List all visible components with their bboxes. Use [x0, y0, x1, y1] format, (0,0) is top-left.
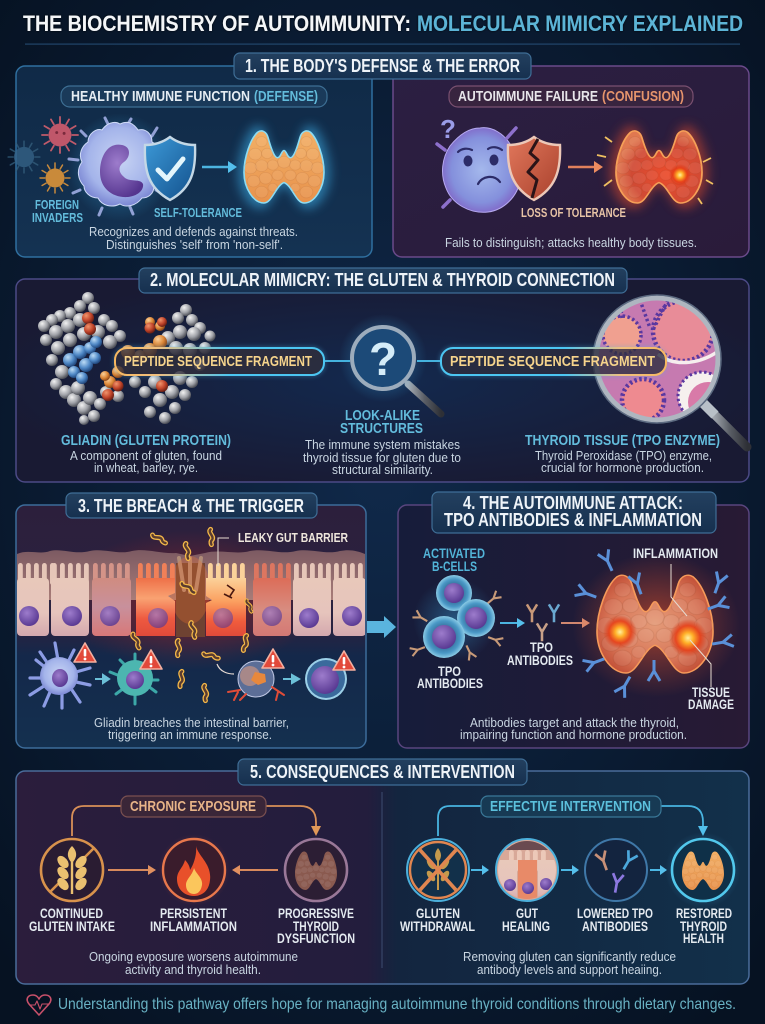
arrow: [95, 675, 109, 683]
label: progressive thyroid dysfunction: PROGRESSIVE: [278, 906, 354, 921]
text block: gliadin: GLIADIN (GLUTEN PROTEIN): [61, 433, 231, 449]
label: tissue damage: DAMAGE: [688, 697, 734, 712]
damaged cells: [136, 563, 246, 636]
pill heading: autoimmune failure: (CONFUSION): [602, 89, 684, 105]
label: tpo antibodies center: [507, 640, 573, 668]
icon: foreign invaders: [8, 117, 78, 193]
label: restored thyroid health: [676, 906, 732, 946]
pill heading: healthy immune function: [61, 86, 327, 107]
pill: effective intervention: [438, 796, 708, 836]
gap between damaged cells: [170, 556, 210, 637]
label: persistent inflammation: [150, 906, 237, 934]
pill heading: autoimmune failure: [449, 86, 693, 107]
icon: persistent inflammation: [158, 834, 230, 906]
label: gluten withdrawal: WITHDRAWAL: [400, 919, 475, 934]
label: foreign invaders: INVADERS: [32, 210, 83, 225]
arrow: [500, 618, 525, 628]
gliadin fragments: [133, 529, 251, 701]
label: tpo antibodies left: ANTIBODIES: [417, 676, 483, 691]
description: attack: [460, 715, 687, 742]
arrow: [650, 865, 667, 875]
label: tpo antibodies center: ANTIBODIES: [507, 653, 573, 668]
section heading 2: [139, 268, 627, 293]
description: healthy function: [89, 224, 298, 252]
icon: broken shield: [508, 137, 560, 200]
label: peptide fragment left: [113, 346, 326, 377]
pill: chronic exposure: [72, 796, 321, 836]
icon: continued gluten intake: [41, 839, 103, 901]
icon: infected cell: [217, 649, 284, 700]
arrow: [232, 865, 278, 875]
label: activated b-cells: B-CELLS: [432, 559, 477, 574]
label: continued gluten intake: CONTINUED: [40, 906, 103, 921]
description: chronic exposure: [89, 949, 298, 977]
label: inflammation: INFLAMMATION: [633, 546, 718, 561]
description: intervention: antibody levels and support heaiing.: [477, 962, 662, 977]
pill: chronic exposure: CHRONIC EXPOSURE: [130, 799, 256, 815]
text block: thyroid tissue: [525, 433, 720, 475]
pill: effective intervention: EFFECTIVE INTERVENTION: [490, 799, 651, 815]
label: activated b-cells: [423, 546, 485, 574]
icon: immune cell: [68, 113, 172, 221]
arrow: [561, 618, 590, 628]
panel: autoimmune attack: [398, 505, 749, 748]
label: foreign invaders: FOREIGN: [35, 197, 79, 212]
text block: look-alike structures: structural similarity.: [332, 462, 433, 477]
icon: healthy thyroid: [238, 125, 330, 209]
icon: gluten withdrawal: [407, 839, 469, 901]
panel: breach and trigger: [16, 505, 371, 748]
description: autoimmune failure: Fails to distinguish; attacks healthy body tissues.: [445, 235, 697, 250]
icon: look-alike magnifier: [339, 314, 441, 414]
label: peptide fragment right: [439, 346, 668, 377]
panel: healthy immune function: [8, 66, 372, 257]
label: lowered tpo antibodies: LOWERED TPO: [577, 906, 653, 921]
icon: confused cell: ?: [440, 114, 456, 144]
label: self-tolerance: SELF-TOLERANCE: [154, 205, 242, 220]
icon: restored thyroid: [665, 832, 741, 908]
label: restored thyroid health: HEALTH: [683, 931, 724, 946]
label: peptide fragment right: PEPTIDE SEQUENCE FRAGMENT: [450, 354, 655, 370]
arrow: [471, 865, 489, 875]
section heading 2: 2. MOLECULAR MIMICRY: THE GLUTEN & THYROID CONNECTION: [150, 270, 615, 290]
label: gluten withdrawal: [400, 906, 475, 934]
label: tissue damage: TISSUE: [692, 685, 730, 700]
label: peptide fragment left: PEPTIDE SEQUENCE FRAGMENT: [124, 354, 312, 370]
panel: molecular mimicry: [16, 279, 749, 482]
text block: look-alike structures: thyroid tissue for gluten due to: [303, 450, 461, 465]
label: persistent inflammation: INFLAMMATION: [150, 919, 237, 934]
icon: dendritic cell: [30, 643, 96, 708]
section heading 1: 1. THE BODY'S DEFENSE & THE ERROR: [245, 56, 520, 76]
text block: thyroid tissue: THYROID TISSUE (TPO ENZYME): [525, 433, 720, 449]
title: THE BIOCHEMISTRY OF AUTOIMMUNITY:: [23, 11, 411, 36]
arrow: section 3 to 4: [367, 616, 396, 638]
text block: gliadin: in wheat, barley, rye.: [94, 460, 198, 475]
section heading 5: [238, 759, 527, 785]
title: [23, 11, 743, 36]
description: chronic exposure: activity and thyroid health.: [125, 962, 261, 977]
section heading 4: 4. THE AUTOIMMUNE ATTACK:: [463, 493, 683, 513]
label: tpo antibodies left: [417, 664, 483, 691]
label: tpo antibodies left: TPO: [438, 664, 461, 679]
label: gluten withdrawal: GLUTEN: [416, 906, 460, 921]
label: tissue damage: [688, 640, 734, 712]
label: tpo antibodies center: TPO: [530, 640, 553, 655]
pill heading: healthy immune function: (DEFENSE): [254, 89, 318, 105]
icon: gliadin molecule: [38, 292, 216, 425]
icon: b-cells: [410, 575, 503, 662]
icon: progressive thyroid dysfunction: [285, 839, 347, 901]
icon: activated teal cell: [110, 650, 162, 704]
icon: sad face: [458, 147, 502, 184]
section heading 5: 5. CONSEQUENCES & INTERVENTION: [250, 762, 515, 782]
panel: consequences and intervention: [16, 771, 749, 984]
icon: antibodies: [527, 604, 559, 641]
panel: autoimmune failure: [393, 66, 749, 257]
label: foreign invaders: [32, 197, 83, 225]
connector lines: [324, 360, 441, 362]
description: intervention: [463, 949, 676, 977]
description: healthy function: Recognizes and defends against threats.: [89, 224, 298, 239]
pill heading: autoimmune failure: AUTOIMMUNE FAILURE: [458, 89, 598, 105]
icon: attacked thyroid: [572, 553, 740, 697]
description: intervention: Removing gluten can significantly reduce: [463, 949, 676, 964]
text block: gliadin: A component of gluten, found: [70, 448, 222, 463]
pill heading: healthy immune function: HEALTHY IMMUNE FUNCTION: [71, 89, 250, 105]
arrow: [568, 161, 603, 173]
icon: plasma cell: [305, 651, 355, 700]
icon: look-alike magnifier: ?: [369, 333, 397, 385]
text block: look-alike structures: STRUCTURES: [340, 421, 423, 437]
arrow: [283, 675, 299, 683]
text block: look-alike structures: LOOK-ALIKE: [345, 408, 420, 424]
section heading 4: [432, 492, 716, 533]
description: healthy function: Distinguishes 'self' from 'non-self'.: [106, 237, 283, 252]
gut barrier cells: [17, 537, 365, 664]
label: restored thyroid health: RESTORED: [676, 906, 732, 921]
text block: look-alike structures: [303, 408, 461, 477]
text block: gliadin: [61, 433, 231, 475]
normal cells: [17, 563, 371, 636]
footer: heart icon: [27, 995, 51, 1015]
label: activated b-cells: ACTIVATED: [423, 546, 485, 561]
text block: thyroid tissue: Thyroid Peroxidase (TPO) enzyme,: [535, 448, 712, 463]
cell nuclei: [19, 606, 362, 628]
description: chronic exposure: Ongoing evposure worsens autoimmune: [89, 949, 298, 964]
arrow: [561, 865, 579, 875]
section heading 4: TPO ANTIBODIES & INFLAMMATION: [444, 510, 702, 530]
label: gut healing: [502, 906, 550, 934]
label: continued gluten intake: GLUTEN INTAKE: [29, 919, 115, 934]
description: attack: Antibodies target and attack the thyroid,: [470, 715, 679, 730]
icon: confused cell: [437, 114, 521, 212]
label: leaky gut barrier: [218, 530, 348, 566]
label: loss of tolerance: LOSS OF TOLERANCE: [521, 205, 626, 220]
label: lowered tpo antibodies: ANTIBODIES: [582, 919, 648, 934]
label: persistent inflammation: PERSISTENT: [160, 906, 228, 921]
icon: shield with check: [145, 137, 195, 200]
section heading 3: 3. THE BREACH & THE TRIGGER: [78, 496, 304, 516]
section heading 3: [66, 493, 317, 518]
arrow: [202, 161, 237, 173]
section heading 1: [234, 53, 531, 79]
label: restored thyroid health: THYROID: [680, 919, 727, 934]
description: attack: impairing function and hormone production.: [460, 727, 687, 742]
icon: gut healing: [496, 839, 558, 902]
description: breach: Gliadin breaches the intestinal barrier,: [94, 715, 289, 730]
icon: thyroid tissue magnifier: [593, 295, 747, 447]
text block: look-alike structures: The immune system mistakes: [305, 437, 460, 452]
label: progressive thyroid dysfunction: THYROID: [293, 919, 339, 934]
description: breach: [94, 715, 289, 742]
label: gut healing: GUT: [516, 906, 539, 921]
description: breach: triggering an immune response.: [108, 727, 272, 742]
label: progressive thyroid dysfunction: [277, 906, 355, 946]
label: lowered tpo antibodies: [577, 906, 653, 934]
icon: surrounding antibodies: [574, 549, 734, 698]
icon: lowered tpo antibodies: [585, 839, 647, 901]
label: gut healing: HEALING: [502, 919, 550, 934]
text block: thyroid tissue: crucial for hormone production.: [541, 460, 704, 475]
arrow: [108, 865, 156, 875]
label: leaky gut barrier: LEAKY GUT BARRIER: [238, 530, 348, 545]
icon: inflamed thyroid: [597, 125, 713, 209]
label: progressive thyroid dysfunction: DYSFUNCTION: [277, 931, 355, 946]
label: inflammation: [633, 546, 718, 616]
label: continued gluten intake: [29, 906, 115, 934]
